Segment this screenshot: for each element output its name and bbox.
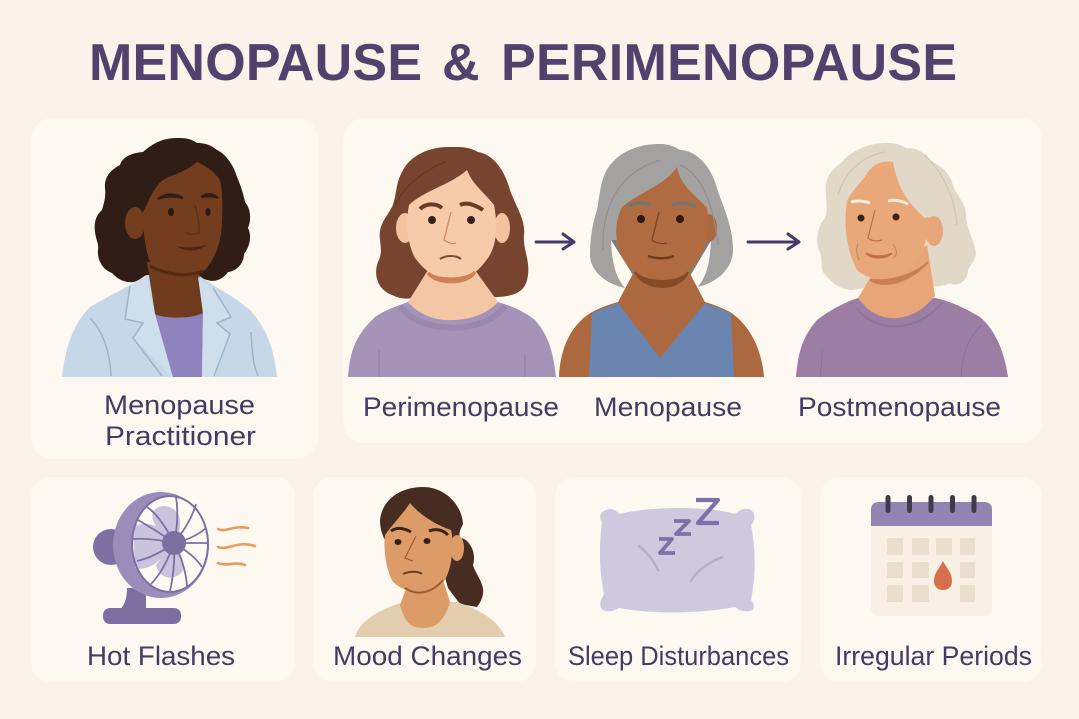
label: menopause: Menopause	[594, 392, 742, 422]
icon: fan	[93, 492, 209, 624]
label: sleep disturbances: Sleep Disturbances	[568, 641, 789, 671]
illustration: menopause woman	[559, 144, 764, 377]
label: mood changes: Mood Changes	[333, 641, 522, 671]
label: perimenopause: Perimenopause	[363, 392, 559, 422]
icon: blood drop	[934, 561, 952, 590]
panel: irregular periods	[820, 477, 1042, 682]
illustration: woman with mood changes	[355, 487, 505, 637]
icon: heat waves	[218, 527, 255, 565]
label: irregular periods: Irregular Periods	[835, 641, 1032, 671]
panel: stages	[343, 118, 1042, 443]
panel: menopause practitioner	[31, 118, 318, 459]
label: menopause practitioner: Practitioner	[105, 421, 256, 451]
panel: hot flashes	[31, 477, 295, 682]
panel: sleep disturbances	[555, 477, 801, 682]
label: menopause practitioner: Menopause	[104, 390, 255, 420]
illustration: postmenopause woman	[796, 143, 1008, 377]
title: &	[442, 34, 480, 92]
icon: pillow	[600, 508, 755, 612]
title: MENOPAUSE	[89, 34, 422, 92]
panel: mood changes	[313, 477, 536, 682]
arrow: perimenopause to menopause	[536, 234, 574, 249]
icon: sleep z letters	[659, 500, 719, 553]
arrow: menopause to postmenopause	[748, 234, 799, 249]
illustration: perimenopause woman	[348, 147, 556, 377]
icon: calendar	[871, 495, 992, 616]
illustration: practitioner	[62, 138, 277, 377]
title: PERIMENOPAUSE	[501, 34, 957, 92]
label: hot flashes: Hot Flashes	[87, 641, 235, 671]
label: postmenopause: Postmenopause	[798, 392, 1001, 422]
